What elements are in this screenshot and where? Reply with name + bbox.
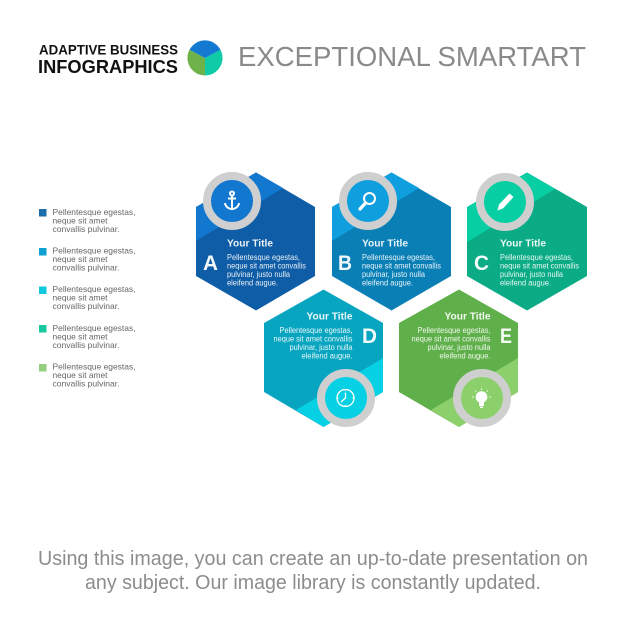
title: EXCEPTIONAL SMARTART (238, 41, 586, 72)
text: A body: eleifend augue. (227, 278, 278, 288)
caption: any subject. Our image library is constantly updated. (85, 572, 541, 594)
panel: hexagon C (467, 172, 587, 310)
text: A title: Your Title (227, 238, 273, 250)
text: E body: Pellentesque egestas, (418, 326, 490, 335)
legend item 2: convallis pulvinar. (52, 264, 120, 272)
panel: hexagon D (264, 290, 383, 427)
text: D body: pulvinar, justo nulla (290, 343, 353, 352)
text: B body: neque sit amet convallis (362, 262, 441, 270)
icon: anchor (225, 192, 239, 209)
text: D title: Your Title (306, 310, 353, 322)
legend item 4 (39, 324, 136, 350)
icon: clock (337, 390, 354, 406)
text: B body: pulvinar, justo nulla (362, 270, 426, 279)
text: B body: eleifend augue. (362, 278, 413, 288)
text: E body (412, 326, 491, 360)
legend item 3: neque sit amet (52, 294, 108, 302)
text: B body: Pellentesque egestas, (362, 253, 435, 262)
legend item 5: neque sit amet (52, 371, 108, 380)
text: A body: neque sit amet convallis (227, 262, 306, 270)
icon: pencil (498, 194, 514, 210)
legend item 4: Pellentesque egestas, (52, 324, 136, 333)
legend item 1: convallis pulvinar. (52, 225, 120, 234)
text: E body: eleifend augue. (440, 352, 490, 360)
brand heading (38, 42, 178, 77)
legend item 3 (39, 285, 136, 311)
text: E body: neque sit amet convallis (412, 334, 491, 344)
brand heading: INFOGRAPHICS (38, 57, 178, 77)
text: E title: Your Title (444, 310, 491, 322)
legend item 2: Pellentesque egestas, (52, 246, 136, 256)
text: D body: neque sit amet convallis (274, 334, 353, 344)
text: D body: Pellentesque egestas, (280, 326, 352, 335)
text: A body: pulvinar, justo nulla (227, 270, 291, 279)
text: D body (274, 326, 353, 360)
text: C body: Pellentesque egestas, (500, 253, 573, 262)
legend (39, 208, 136, 388)
legend item 3: convallis pulvinar. (52, 302, 120, 311)
letter E: E (500, 325, 512, 348)
caption (38, 548, 588, 594)
brand heading: ADAPTIVE BUSINESS (39, 42, 178, 58)
letter C: C (474, 252, 489, 275)
panel: hexagon B (332, 172, 451, 310)
legend item 1: neque sit amet (52, 216, 108, 226)
text: B body (362, 253, 441, 288)
text: A body (227, 253, 306, 288)
panel: hexagon A (196, 172, 315, 310)
text: E body: pulvinar, justo nulla (428, 343, 491, 352)
text: B title: Your Title (362, 238, 408, 250)
letter A: A (203, 252, 218, 275)
legend item 4: neque sit amet (52, 332, 108, 342)
text: C body (500, 253, 579, 288)
legend item 2: neque sit amet (52, 255, 108, 264)
legend item 5: Pellentesque egestas, (52, 362, 136, 372)
legend item 5: convallis pulvinar. (52, 380, 120, 388)
legend item 5 (39, 362, 136, 388)
legend item 4: convallis pulvinar. (52, 341, 120, 350)
text: A body: Pellentesque egestas, (227, 253, 300, 262)
icon: logo circle (187, 40, 223, 76)
legend item 1 (39, 208, 136, 234)
text: C body: pulvinar, justo nulla (500, 270, 564, 279)
text: D body: eleifend augue. (302, 352, 352, 360)
letter D: D (362, 325, 377, 348)
legend item 3: Pellentesque egestas, (52, 285, 136, 294)
text: C title: Your Title (500, 238, 546, 250)
icon: magnifier (360, 193, 375, 209)
panel: hexagon E (399, 290, 518, 427)
letter B: B (338, 252, 352, 275)
legend item 2 (39, 246, 136, 272)
caption: Using this image, you can create an up-to-date presentation on (38, 548, 588, 570)
legend item 1: Pellentesque egestas, (52, 208, 136, 217)
text: C body: neque sit amet convallis (500, 262, 579, 270)
text: C body: eleifend augue. (500, 278, 551, 288)
icon: light bulb (472, 388, 491, 408)
